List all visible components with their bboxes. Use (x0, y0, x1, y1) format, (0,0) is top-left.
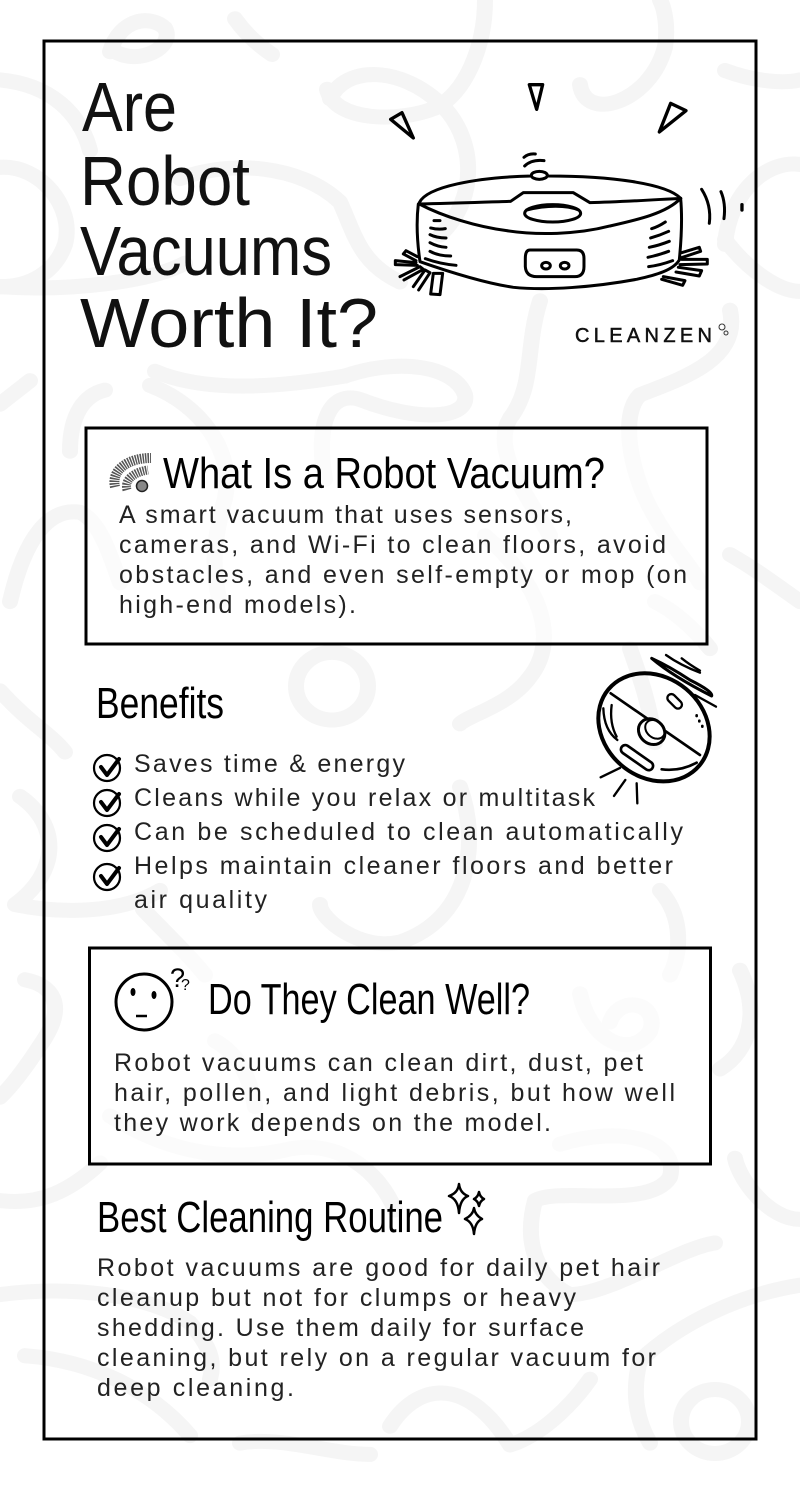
heading: do they clean well: Do They Clean Well? (208, 975, 530, 1024)
heading: benefits: Benefits (96, 679, 224, 728)
text: benefit items: Helps maintain cleaner floors and better (134, 852, 673, 880)
text: benefit items: air quality (134, 886, 268, 914)
text: routine advice: Robot vacuums are good for daily pet hair (97, 1254, 660, 1282)
panel: do they clean well (90, 948, 710, 1164)
icon: thinking face (116, 963, 190, 1030)
text: benefit items: Can be scheduled to clean automatically (134, 818, 684, 846)
text: routine advice: cleaning, but rely on a regular vacuum for (97, 1344, 656, 1372)
text: cleaning explanation: they work depends on the model. (114, 1109, 551, 1137)
text: benefit items: Cleans while you relax or multitask (134, 784, 596, 812)
text: cleaning explanation (114, 1049, 675, 1137)
text: benefit items: Saves time & energy (134, 750, 406, 778)
icon: robot vacuum side view (391, 85, 742, 295)
title: Vacuums (80, 212, 332, 290)
icon: check 1 (94, 755, 120, 781)
text: benefit items (134, 750, 684, 914)
text: routine advice (97, 1254, 660, 1402)
title: Robot (80, 142, 250, 220)
text: routine advice: deep cleaning. (97, 1374, 294, 1402)
heading: best cleaning routine: Best Cleaning Routine (97, 1193, 443, 1242)
heading: what is a robot vacuum: What Is a Robot Vacuum? (163, 449, 605, 498)
icon: robot vacuum top view (576, 651, 732, 804)
icon: check 2 (94, 790, 120, 816)
panel: what is a robot vacuum (86, 428, 707, 644)
text: cleaning explanation: hair, pollen, and light debris, but how well (114, 1079, 675, 1107)
icon: thinking face: ? (181, 977, 190, 994)
text: definition: A smart vacuum that uses sensors, (119, 501, 572, 529)
title: Worth It? (80, 284, 378, 362)
icon: wifi (114, 458, 151, 492)
logo: CleanZen: CLEANZEN (575, 325, 712, 347)
text: definition: cameras, and Wi-Fi to clean floors, avoid (119, 531, 666, 559)
text: routine advice: shedding. Use them daily for surface (97, 1314, 584, 1342)
title: Are (82, 68, 177, 146)
icon: thinking face: ? (170, 963, 185, 993)
text: definition: high-end models). (119, 591, 356, 619)
list: benefits (94, 750, 684, 914)
title (80, 68, 378, 362)
text: routine advice: cleanup but not for clumps or heavy (97, 1284, 576, 1312)
icon: check 4 (94, 864, 120, 890)
icon: check 3 (94, 825, 120, 851)
icon: sparkles (449, 1184, 484, 1234)
text: definition: obstacles, and even self-empty or mop (on (119, 561, 687, 589)
text: cleaning explanation: Robot vacuums can clean dirt, dust, pet (114, 1049, 643, 1077)
text: definition (119, 501, 687, 619)
